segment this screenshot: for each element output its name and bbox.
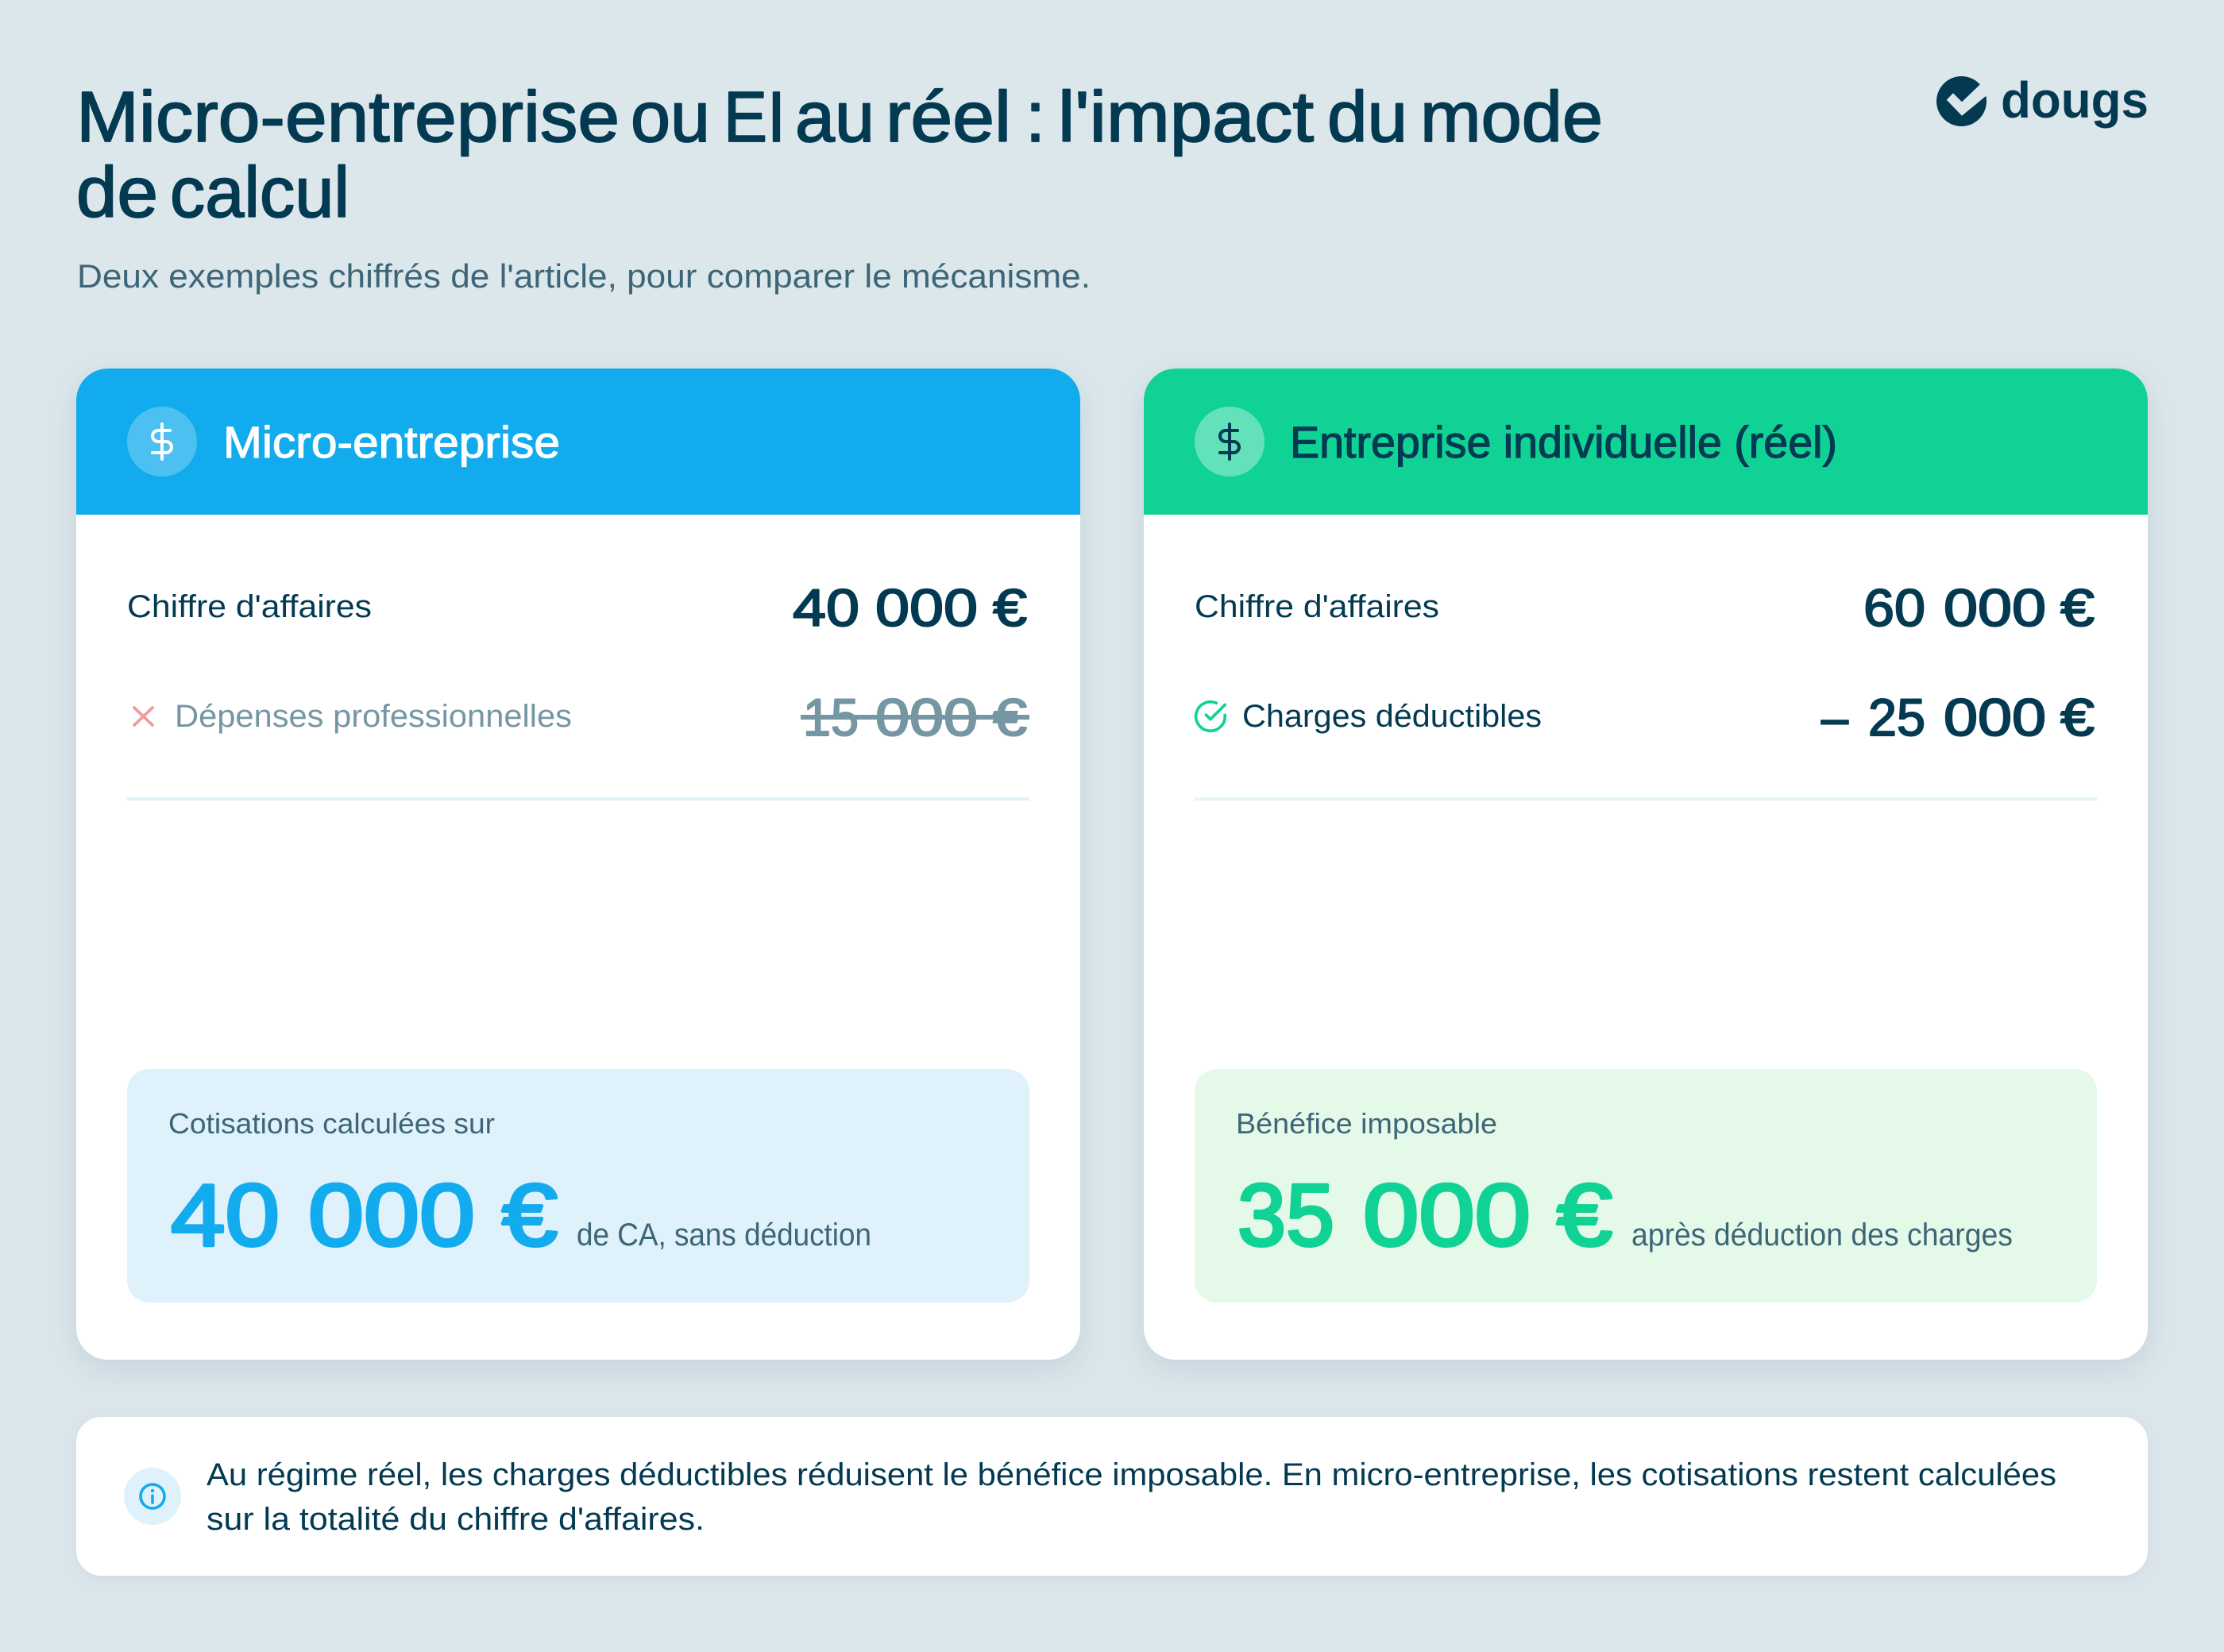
- panel heading: Entreprise individuelle (réel): [1290, 417, 1837, 467]
- row: chiffre d'affaires: €: [993, 578, 1027, 637]
- result box: cotisations: [127, 1069, 1029, 1303]
- panel heading: Micro-entreprise: [223, 417, 560, 467]
- panel: entreprise individuelle: [1144, 369, 2148, 1360]
- title: :: [1025, 78, 1045, 157]
- title: mode: [1420, 78, 1603, 157]
- panel header: micro-entreprise: [76, 369, 1080, 515]
- title: Micro-entreprise: [76, 78, 620, 157]
- icon: dollar: [127, 407, 197, 477]
- title: réel: [886, 78, 1011, 157]
- footer text: [207, 1457, 2056, 1537]
- title: du: [1327, 78, 1407, 157]
- row: chiffre d'affaires: €: [2060, 578, 2095, 637]
- title: calcul: [170, 153, 349, 233]
- logo: dougs: [1936, 71, 2149, 129]
- icon: dollar: [1195, 407, 1265, 477]
- row: chiffre d'affaires: [1195, 578, 2095, 637]
- footer note: [76, 1417, 2148, 1576]
- footer text: Au régime réel, les charges déductibles réduisent le bénéfice imposable. En micro-entreprise, les cotisations restent calculées: [207, 1457, 2056, 1492]
- result box: bénéfice imposable: après déduction des charges: [1631, 1218, 2013, 1253]
- title: [76, 78, 1603, 233]
- row: dépenses professionnelles: Dépenses professionnelles: [175, 699, 572, 734]
- title: au: [795, 78, 875, 157]
- row: chiffre d'affaires: 000: [1944, 578, 2046, 637]
- result box: cotisations: 40: [171, 1167, 280, 1264]
- row: charges déductibles: Charges déductibles: [1242, 699, 1542, 734]
- icon: cross: [134, 708, 153, 725]
- result box: bénéfice imposable: €: [1557, 1167, 1612, 1264]
- logo wordmark: dougs: [2001, 71, 2149, 129]
- row: dépenses professionnelles: 000: [875, 688, 978, 747]
- row: chiffre d'affaires: Chiffre d'affaires: [1195, 589, 1439, 624]
- icon: logo check circle: [1936, 76, 1990, 126]
- icon: info: [124, 1468, 181, 1525]
- row: chiffre d'affaires: 40: [793, 578, 859, 637]
- title: EI: [724, 78, 786, 157]
- row: chiffre d'affaires: 60: [1863, 578, 1925, 637]
- row: dépenses professionnelles: [134, 688, 1029, 747]
- row: chiffre d'affaires: Chiffre d'affaires: [127, 589, 372, 624]
- result box: cotisations: Cotisations calculées sur: [168, 1107, 495, 1140]
- row: charges déductibles: –: [1821, 688, 1848, 747]
- row: dépenses professionnelles: €: [993, 688, 1027, 747]
- title: ou: [631, 78, 710, 157]
- result box: bénéfice imposable: Bénéfice imposable: [1236, 1107, 1497, 1140]
- panel: micro-entreprise: [76, 369, 1080, 1360]
- row: chiffre d'affaires: 000: [875, 578, 978, 637]
- row: charges déductibles: [1196, 688, 2095, 747]
- row: charges déductibles: 000: [1944, 688, 2046, 747]
- result box: cotisations: €: [502, 1167, 558, 1264]
- result box: bénéfice imposable: [1195, 1069, 2097, 1303]
- title: l'impact: [1058, 78, 1314, 157]
- footer text: sur la totalité du chiffre d'affaires.: [207, 1502, 705, 1537]
- subtitle: Deux exemples chiffrés de l'article, pour comparer le mécanisme.: [77, 257, 1091, 295]
- row: dépenses professionnelles: 15: [803, 688, 859, 747]
- icon: check circle: [1196, 702, 1225, 731]
- title: de: [76, 153, 158, 233]
- result box: cotisations: 000: [308, 1167, 475, 1264]
- row: charges déductibles: €: [2060, 688, 2095, 747]
- result box: bénéfice imposable: 000: [1363, 1167, 1531, 1264]
- result box: bénéfice imposable: 35: [1237, 1167, 1334, 1264]
- panel header: entreprise individuelle: [1144, 369, 2148, 515]
- result box: cotisations: de CA, sans déduction: [577, 1218, 871, 1253]
- row: chiffre d'affaires: [127, 578, 1027, 637]
- row: charges déductibles: 25: [1868, 688, 1925, 747]
